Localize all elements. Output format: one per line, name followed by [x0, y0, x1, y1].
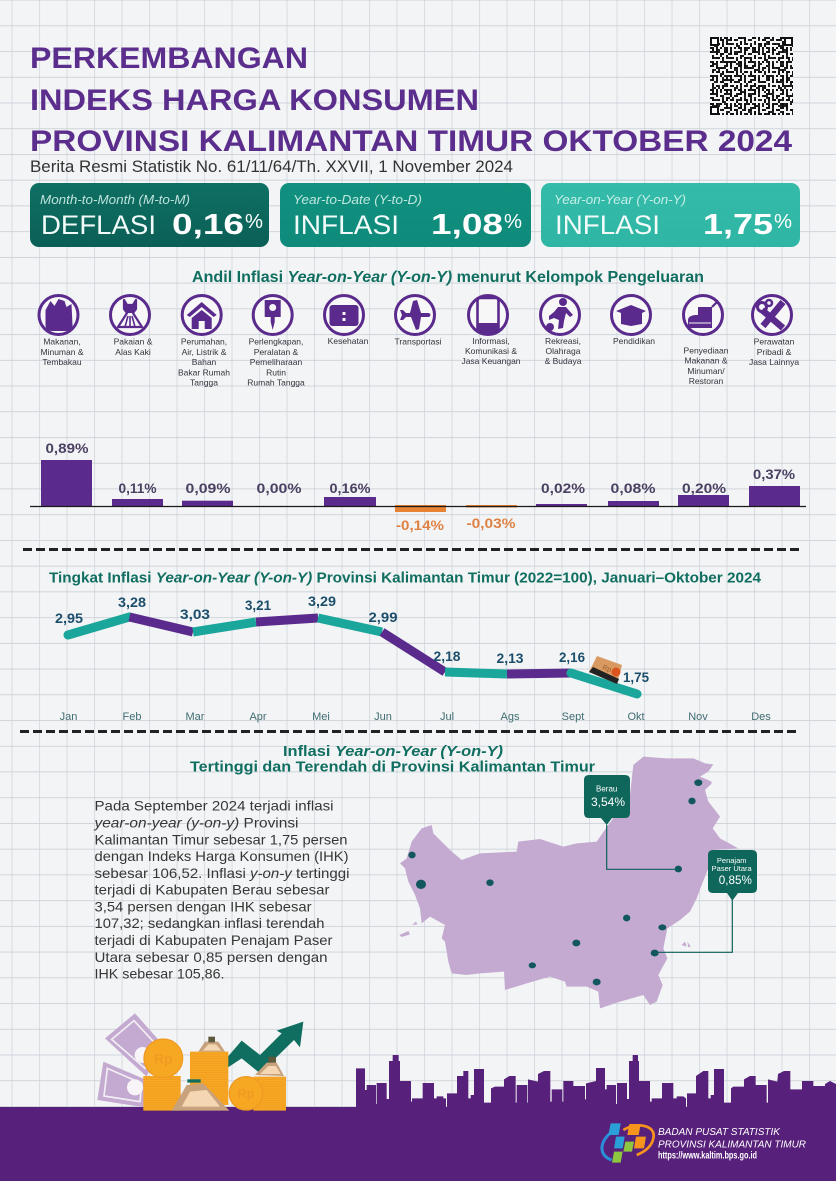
- bar values: 0,11%: [118, 480, 157, 496]
- data labels: 3,21: [245, 597, 271, 613]
- text: BPS identity: https://www.kaltim.bps.go.id: [658, 1150, 757, 1162]
- panel: month-to-month: %: [245, 211, 263, 233]
- bar chart: andil inflasi: [30, 440, 806, 533]
- panel: year-on-year: 1,75: [703, 209, 773, 241]
- bar values: 0,02%: [541, 480, 586, 496]
- title: PROVINSI KALIMANTAN TIMUR OKTOBER 2024: [30, 125, 792, 158]
- panel: year-on-year: %: [774, 211, 792, 233]
- label: perlengkapan: [247, 336, 305, 388]
- data labels: 2,16: [559, 649, 585, 665]
- panel: year-on-year: Year-on-Year (Y-on-Y): [554, 193, 686, 207]
- data labels: 2,18: [434, 648, 461, 664]
- text block: penjelasan: IHK sebesar 105,86.: [94, 966, 224, 982]
- label: makanan: Tembakau: [42, 357, 82, 367]
- illustration: money, coins and rising arrow: Rp: [238, 1087, 255, 1101]
- label: informasi: Jasa Keuangan: [461, 356, 521, 366]
- title: PERKEMBANGAN: [30, 42, 308, 75]
- icon: makanan: [39, 296, 78, 334]
- text block: penjelasan: [93, 798, 350, 982]
- bar values: -0,14%: [396, 517, 445, 533]
- month labels: Mei: [312, 711, 330, 723]
- label: perlengkapan: Rutin: [266, 368, 286, 378]
- month labels: Jan: [60, 711, 77, 723]
- bar values: 0,20%: [682, 480, 727, 496]
- line chart: inflasi bulanan: [55, 593, 771, 723]
- label: rekreasi: [545, 336, 582, 366]
- icon: perlengkapan: [253, 296, 292, 334]
- panel: year-to-date: 1,08: [431, 209, 503, 241]
- callout: penajam paser utara: Paser Utara: [712, 864, 753, 873]
- icon: perumahan: [182, 296, 221, 334]
- data labels: 3,29: [308, 593, 336, 609]
- logo: BPS: [602, 1123, 654, 1163]
- panel: year-to-date: INFLASI: [293, 210, 399, 240]
- title: [30, 42, 792, 158]
- month labels: [60, 711, 771, 723]
- bar values: 0,08%: [610, 480, 656, 496]
- month labels: Apr: [249, 711, 267, 723]
- label: informasi: [461, 336, 521, 366]
- panel: month-to-month: [30, 183, 269, 247]
- month labels: Mar: [186, 711, 205, 723]
- panel: month-to-month: 0,16: [172, 209, 244, 241]
- icon: informasi: [468, 296, 508, 334]
- panel: year-on-year: INFLASI: [555, 210, 660, 240]
- label: perumahan: Tangga: [190, 378, 218, 388]
- callout: berau: 3,54%: [591, 795, 625, 809]
- icon: pakaian: [110, 296, 150, 334]
- callout: berau: [584, 775, 678, 869]
- panel: year-to-date: [280, 183, 531, 247]
- icon: transportasi: [396, 296, 434, 334]
- subtitle: Berita Resmi Statistik No. 61/11/64/Th. XXVII, 1 November 2024: [30, 157, 513, 176]
- text block: penjelasan: Kalimantan Timur sebesar 1,75 persen: [94, 831, 348, 847]
- data labels: 2,13: [496, 650, 524, 666]
- text: BPS identity: BADAN PUSAT STATISTIK: [658, 1126, 781, 1138]
- label: perumahan: Bakar Rumah: [178, 368, 230, 378]
- text block: penjelasan: year-on-year (y-on-y) Provinsi: [93, 814, 299, 830]
- data labels: 3,28: [118, 594, 146, 610]
- data labels: 2,95: [55, 610, 83, 626]
- label: transportasi: Transportasi: [395, 336, 442, 346]
- skyline: [350, 1055, 836, 1120]
- label: penyediaan: [684, 346, 729, 386]
- text block: penjelasan: 3,54 persen dengan IHK sebesar: [94, 898, 312, 914]
- data labels: 2,99: [368, 609, 398, 625]
- label: perlengkapan: Rumah Tangga: [247, 378, 305, 388]
- label: kesehatan: Kesehatan: [328, 336, 369, 346]
- month labels: Nov: [688, 711, 708, 723]
- bar values: 0,89%: [46, 440, 89, 456]
- label: rekreasi: Olahraga: [546, 346, 581, 356]
- label: informasi: Komunikasi &: [465, 346, 517, 356]
- label: penyediaan: Penyediaan: [684, 346, 729, 356]
- text block: penjelasan: terjadi di Kabupaten Penajam Paser: [94, 932, 333, 948]
- map: kalimantan timur: [399, 757, 738, 1008]
- icon: money bundle: [589, 656, 622, 684]
- month labels: Feb: [123, 711, 141, 723]
- bar values: -0,03%: [466, 515, 516, 531]
- illustration: money, coins and rising arrow: [97, 1013, 303, 1111]
- month labels: Jun: [374, 711, 392, 723]
- label: makanan: Minuman &: [40, 347, 84, 357]
- bar values: 0,37%: [753, 466, 796, 482]
- month labels: Des: [751, 711, 771, 723]
- label: perumahan: Bahan: [192, 357, 217, 367]
- district markers: [408, 779, 702, 985]
- label: perawatan: [749, 336, 799, 367]
- icon: penyediaan: [684, 296, 722, 334]
- bar values: 0,09%: [186, 480, 231, 496]
- text block: penjelasan: terjadi di Kabupaten Berau sebesar: [94, 882, 330, 898]
- label: perlengkapan: Peralatan &: [254, 347, 299, 357]
- icon: kesehatan: [324, 296, 364, 334]
- title: INDEKS HARGA KONSUMEN: [30, 84, 479, 117]
- text block: penjelasan: sebesar 106,52. Inflasi y-on-y tertinggi: [94, 865, 350, 881]
- panel: year-on-year: [541, 183, 800, 247]
- label: perlengkapan: Perlengkapan,: [249, 336, 303, 346]
- label: pakaian: Alas Kaki: [115, 347, 151, 357]
- icon: QR code: [710, 37, 793, 115]
- icon: perawatan: [752, 296, 792, 334]
- label: penyediaan: Makanan &: [684, 356, 728, 366]
- label: informasi: Informasi,: [472, 336, 510, 346]
- footer band: [0, 1107, 836, 1181]
- heading: andil inflasi: Andil Inflasi Year-on-Year (Y-on-Y) menurut Kelompok Pengeluaran: [192, 269, 704, 286]
- callout: penajam paser utara: [655, 850, 757, 952]
- heading: inflasi tertinggi dan terendah: Tertinggi dan Terendah di Provinsi Kalimantan Timur: [190, 760, 595, 776]
- heading: inflasi tertinggi dan terendah: [190, 744, 595, 776]
- text block: penjelasan: Pada September 2024 terjadi inflasi: [94, 798, 334, 814]
- illustration: money, coins and rising arrow: Rp: [154, 1050, 173, 1066]
- label: perumahan: Air, Listrik &: [182, 347, 227, 357]
- icon: money bundle: Rp: [601, 664, 612, 674]
- label: perawatan: Pribadi &: [757, 347, 792, 357]
- month labels: Okt: [627, 711, 645, 723]
- data labels: [55, 593, 649, 685]
- heading: inflasi tertinggi dan terendah: Inflasi Year-on-Year (Y-on-Y): [283, 744, 503, 760]
- bar values: 0,00%: [256, 480, 302, 496]
- callout: berau: Berau: [596, 784, 617, 794]
- label: penyediaan: Restoran: [689, 376, 724, 386]
- callout: penajam paser utara: Penajam: [717, 856, 747, 865]
- month labels: Ags: [501, 711, 520, 723]
- data labels: 1,75: [623, 669, 649, 685]
- icon: rekreasi: [540, 296, 580, 334]
- text: BPS identity: PROVINSI KALIMANTAN TIMUR: [658, 1138, 806, 1150]
- panel: year-to-date: %: [504, 211, 522, 233]
- bar values: [46, 440, 796, 533]
- label: pakaian: Pakaian &: [114, 336, 153, 346]
- text block: penjelasan: Utara sebesar 0,85 persen dengan: [94, 949, 328, 965]
- panel: month-to-month: Month-to-Month (M-to-M): [40, 193, 190, 207]
- data labels: 3,03: [180, 606, 210, 622]
- icon: pendidikan: [612, 296, 650, 334]
- heading: tingkat inflasi: Tingkat Inflasi Year-on-Year (Y-on-Y) Provinsi Kalimantan Timur (2022=100), Januari–Oktober 2024: [49, 570, 761, 586]
- label: perumahan: Perumahan,: [181, 336, 227, 346]
- text block: penjelasan: 107,32; sedangkan inflasi terendah: [94, 915, 324, 931]
- month labels: Sept: [562, 711, 584, 723]
- month labels: Jul: [440, 711, 454, 723]
- bar values: 0,16%: [330, 480, 371, 496]
- label: perawatan: Jasa Lainnya: [749, 357, 799, 367]
- callout: penajam paser utara: 0,85%: [719, 873, 752, 887]
- label: pendidikan: Pendidikan: [613, 336, 655, 346]
- text block: penjelasan: dengan Indeks Harga Konsumen (IHK): [94, 848, 348, 864]
- label: makanan: [40, 336, 84, 367]
- label: perumahan: [178, 336, 230, 388]
- text: BPS identity: [658, 1126, 806, 1162]
- label: perawatan: Perawatan: [754, 336, 795, 346]
- label: makanan: Makanan,: [43, 336, 81, 346]
- panel: year-to-date: Year-to-Date (Y-to-D): [293, 193, 422, 207]
- label: penyediaan: Minuman/: [687, 366, 725, 376]
- label: rekreasi: Rekreasi,: [545, 336, 581, 346]
- panel: month-to-month: DEFLASI: [41, 210, 156, 240]
- label: perlengkapan: Pemeliharaan: [250, 357, 302, 367]
- label: pakaian: [114, 336, 153, 357]
- label: rekreasi: & Budaya: [545, 356, 582, 366]
